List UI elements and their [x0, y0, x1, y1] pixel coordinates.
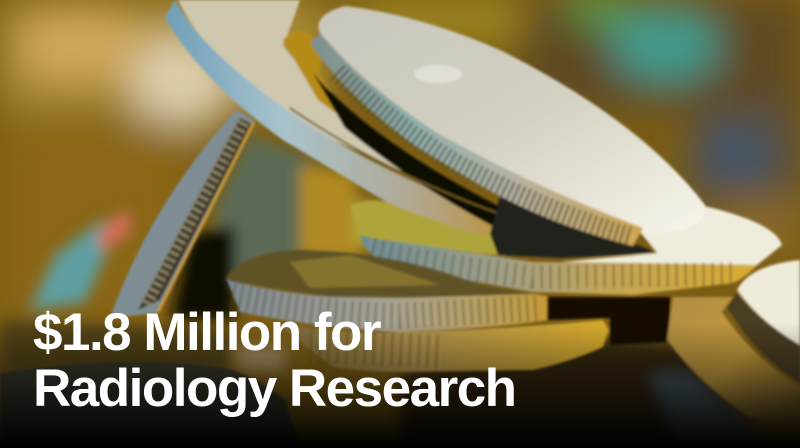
- left standing coin: [110, 110, 254, 318]
- lower right dark rim: [727, 293, 800, 383]
- title: Radiology Research: [33, 359, 516, 418]
- gold patches on middle coin: [290, 255, 440, 288]
- title: $1.8 Million for: [33, 303, 380, 362]
- title: [33, 303, 516, 418]
- dark gaps between coins: [547, 297, 670, 345]
- gold coin: [275, 320, 609, 372]
- lower right gold coin: [667, 297, 800, 427]
- yellow green coin behind: [350, 201, 512, 256]
- main coin face: [318, 6, 705, 232]
- dark foreground coin: [0, 362, 300, 448]
- main coin ridged edge: [310, 33, 643, 246]
- dark wedge: [490, 196, 657, 258]
- lower coin edge: [360, 235, 757, 295]
- lower right coin face: [560, 205, 782, 265]
- lower right white coin: [737, 260, 800, 345]
- upper left coin: [165, 0, 552, 235]
- middle coin edge: [227, 280, 547, 332]
- middle coin face: [225, 250, 535, 298]
